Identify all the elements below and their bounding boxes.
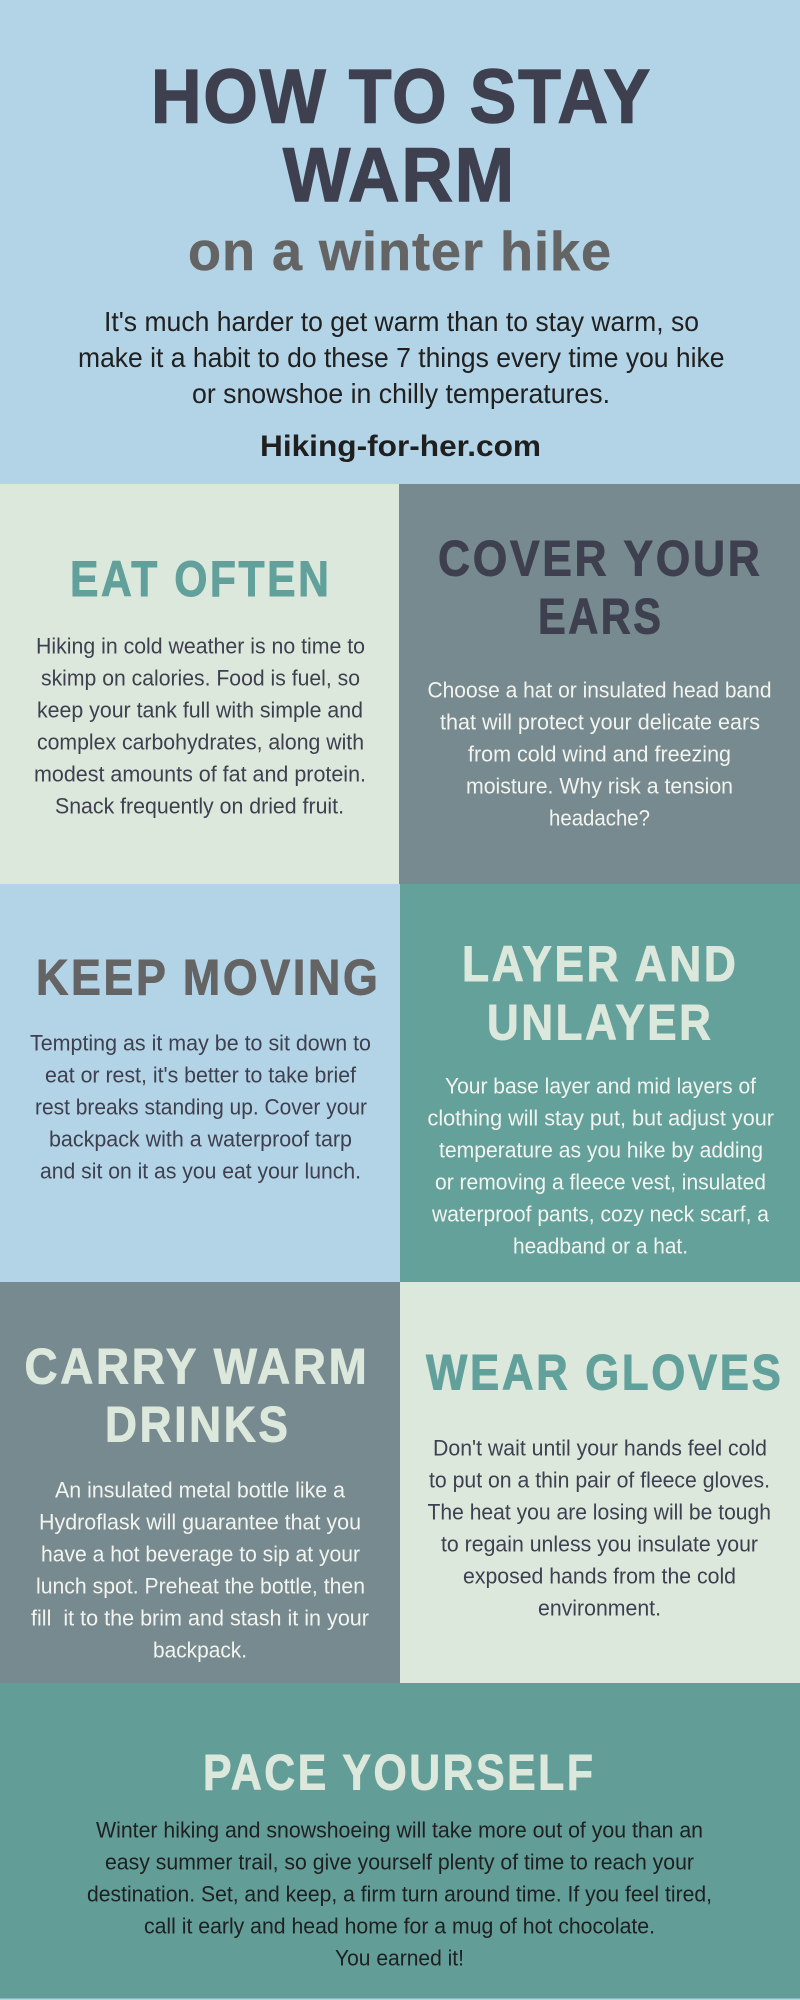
body: layer and unlayer: waterproof pants, cozy neck scarf, a xyxy=(431,1201,770,1226)
heading: carry warm drinks: CARRY WARM xyxy=(24,1338,370,1394)
body: carry warm drinks xyxy=(31,1477,369,1662)
body: eat often: Snack frequently on dried fruit. xyxy=(55,793,344,818)
body: pace yourself: call it early and head home for a mug of hot chocolate. xyxy=(144,1914,655,1939)
panel: layer and unlayer xyxy=(400,884,800,1282)
body: layer and unlayer: or removing a fleece vest, insulated xyxy=(435,1169,766,1194)
body: layer and unlayer: headband or a hat. xyxy=(513,1233,688,1258)
title: HOW TO STAY xyxy=(151,55,652,140)
body: keep moving: rest breaks standing up. Cover your xyxy=(35,1095,367,1120)
body: eat often: Hiking in cold weather is no time to xyxy=(36,633,365,658)
body: wear gloves: to regain unless you insulate your xyxy=(441,1532,758,1557)
panel: cover your ears xyxy=(399,484,800,884)
body: carry warm drinks: An insulated metal bottle like a xyxy=(55,1477,346,1502)
intro text: or snowshoe in chilly temperatures. xyxy=(192,378,610,409)
intro text: It's much harder to get warm than to stay warm, so xyxy=(104,306,699,337)
body: layer and unlayer xyxy=(428,1073,774,1258)
body: carry warm drinks: Hydroflask will guarantee that you xyxy=(39,1509,361,1534)
panel: carry warm drinks xyxy=(0,1282,400,1683)
body: wear gloves xyxy=(428,1436,771,1621)
heading: keep moving: KEEP MOVING xyxy=(36,949,380,1005)
body: eat often xyxy=(34,633,366,818)
body: keep moving: and sit on it as you eat your lunch. xyxy=(40,1159,361,1184)
body: cover your ears: Choose a hat or insulated head band xyxy=(428,677,772,702)
body: layer and unlayer: clothing will stay put, but adjust your xyxy=(428,1105,774,1130)
body: pace yourself: destination. Set, and keep, a firm turn around time. If you feel tired, xyxy=(87,1882,712,1907)
body: keep moving: eat or rest, it's better to take brief xyxy=(45,1063,357,1088)
heading: carry warm drinks: DRINKS xyxy=(105,1396,290,1452)
intro text xyxy=(78,306,724,409)
title xyxy=(151,55,652,218)
panel: wear gloves xyxy=(400,1282,800,1683)
panel: pace yourself xyxy=(0,1683,800,1998)
heading: layer and unlayer xyxy=(462,936,738,1050)
body: carry warm drinks: fill it to the brim and stash it in your xyxy=(31,1605,369,1630)
body: wear gloves: environment. xyxy=(538,1596,661,1621)
body: keep moving: Tempting as it may be to sit down to xyxy=(30,1031,371,1056)
heading: eat often: EAT OFTEN xyxy=(70,551,332,607)
body: wear gloves: The heat you are losing will be tough xyxy=(428,1500,771,1525)
body: wear gloves: exposed hands from the cold xyxy=(463,1564,736,1589)
heading: layer and unlayer: LAYER AND xyxy=(462,936,738,992)
body: keep moving: backpack with a waterproof tarp xyxy=(49,1127,352,1152)
body: wear gloves: to put on a thin pair of fleece gloves. xyxy=(429,1468,770,1493)
body: eat often: keep your tank full with simple and xyxy=(37,697,363,722)
intro text: make it a habit to do these 7 things every time you hike xyxy=(78,342,724,373)
heading: cover your ears: EARS xyxy=(538,588,664,644)
heading: cover your ears: COVER YOUR xyxy=(438,531,762,587)
body: pace yourself xyxy=(87,1818,712,1971)
body: cover your ears: headache? xyxy=(549,805,650,830)
subtitle: on a winter hike xyxy=(188,220,612,282)
title: WARM xyxy=(283,133,516,218)
heading: layer and unlayer: UNLAYER xyxy=(487,994,714,1050)
body: cover your ears: from cold wind and freezing xyxy=(468,741,731,766)
body: carry warm drinks: have a hot beverage to sip at your xyxy=(41,1541,360,1566)
body: keep moving xyxy=(30,1031,371,1184)
body: cover your ears xyxy=(428,677,772,830)
body: layer and unlayer: Your base layer and mid layers of xyxy=(445,1073,757,1098)
panel: eat often xyxy=(0,484,399,884)
body: cover your ears: that will protect your delicate ears xyxy=(440,709,760,734)
body: wear gloves: Don't wait until your hands feel cold xyxy=(433,1436,767,1461)
heading: pace yourself: PACE YOURSELF xyxy=(203,1744,596,1800)
body: pace yourself: easy summer trail, so give yourself plenty of time to reach your xyxy=(105,1850,694,1875)
body: layer and unlayer: temperature as you hike by adding xyxy=(439,1137,763,1162)
panel: header xyxy=(0,0,800,484)
panel: keep moving xyxy=(0,884,400,1282)
heading: cover your ears xyxy=(438,531,762,644)
body: carry warm drinks: lunch spot. Preheat the bottle, then xyxy=(36,1573,365,1598)
body: eat often: complex carbohydrates, along with xyxy=(37,729,364,754)
body: pace yourself: You earned it! xyxy=(335,1946,464,1971)
body: eat often: skimp on calories. Food is fuel, so xyxy=(41,665,360,690)
heading: carry warm drinks xyxy=(24,1338,370,1452)
body: eat often: modest amounts of fat and protein. xyxy=(34,761,366,786)
website name: Hiking-for-her.com xyxy=(260,430,541,463)
body: pace yourself: Winter hiking and snowshoeing will take more out of you than an xyxy=(96,1818,703,1843)
body: carry warm drinks: backpack. xyxy=(153,1637,247,1662)
body: cover your ears: moisture. Why risk a tension xyxy=(466,773,733,798)
